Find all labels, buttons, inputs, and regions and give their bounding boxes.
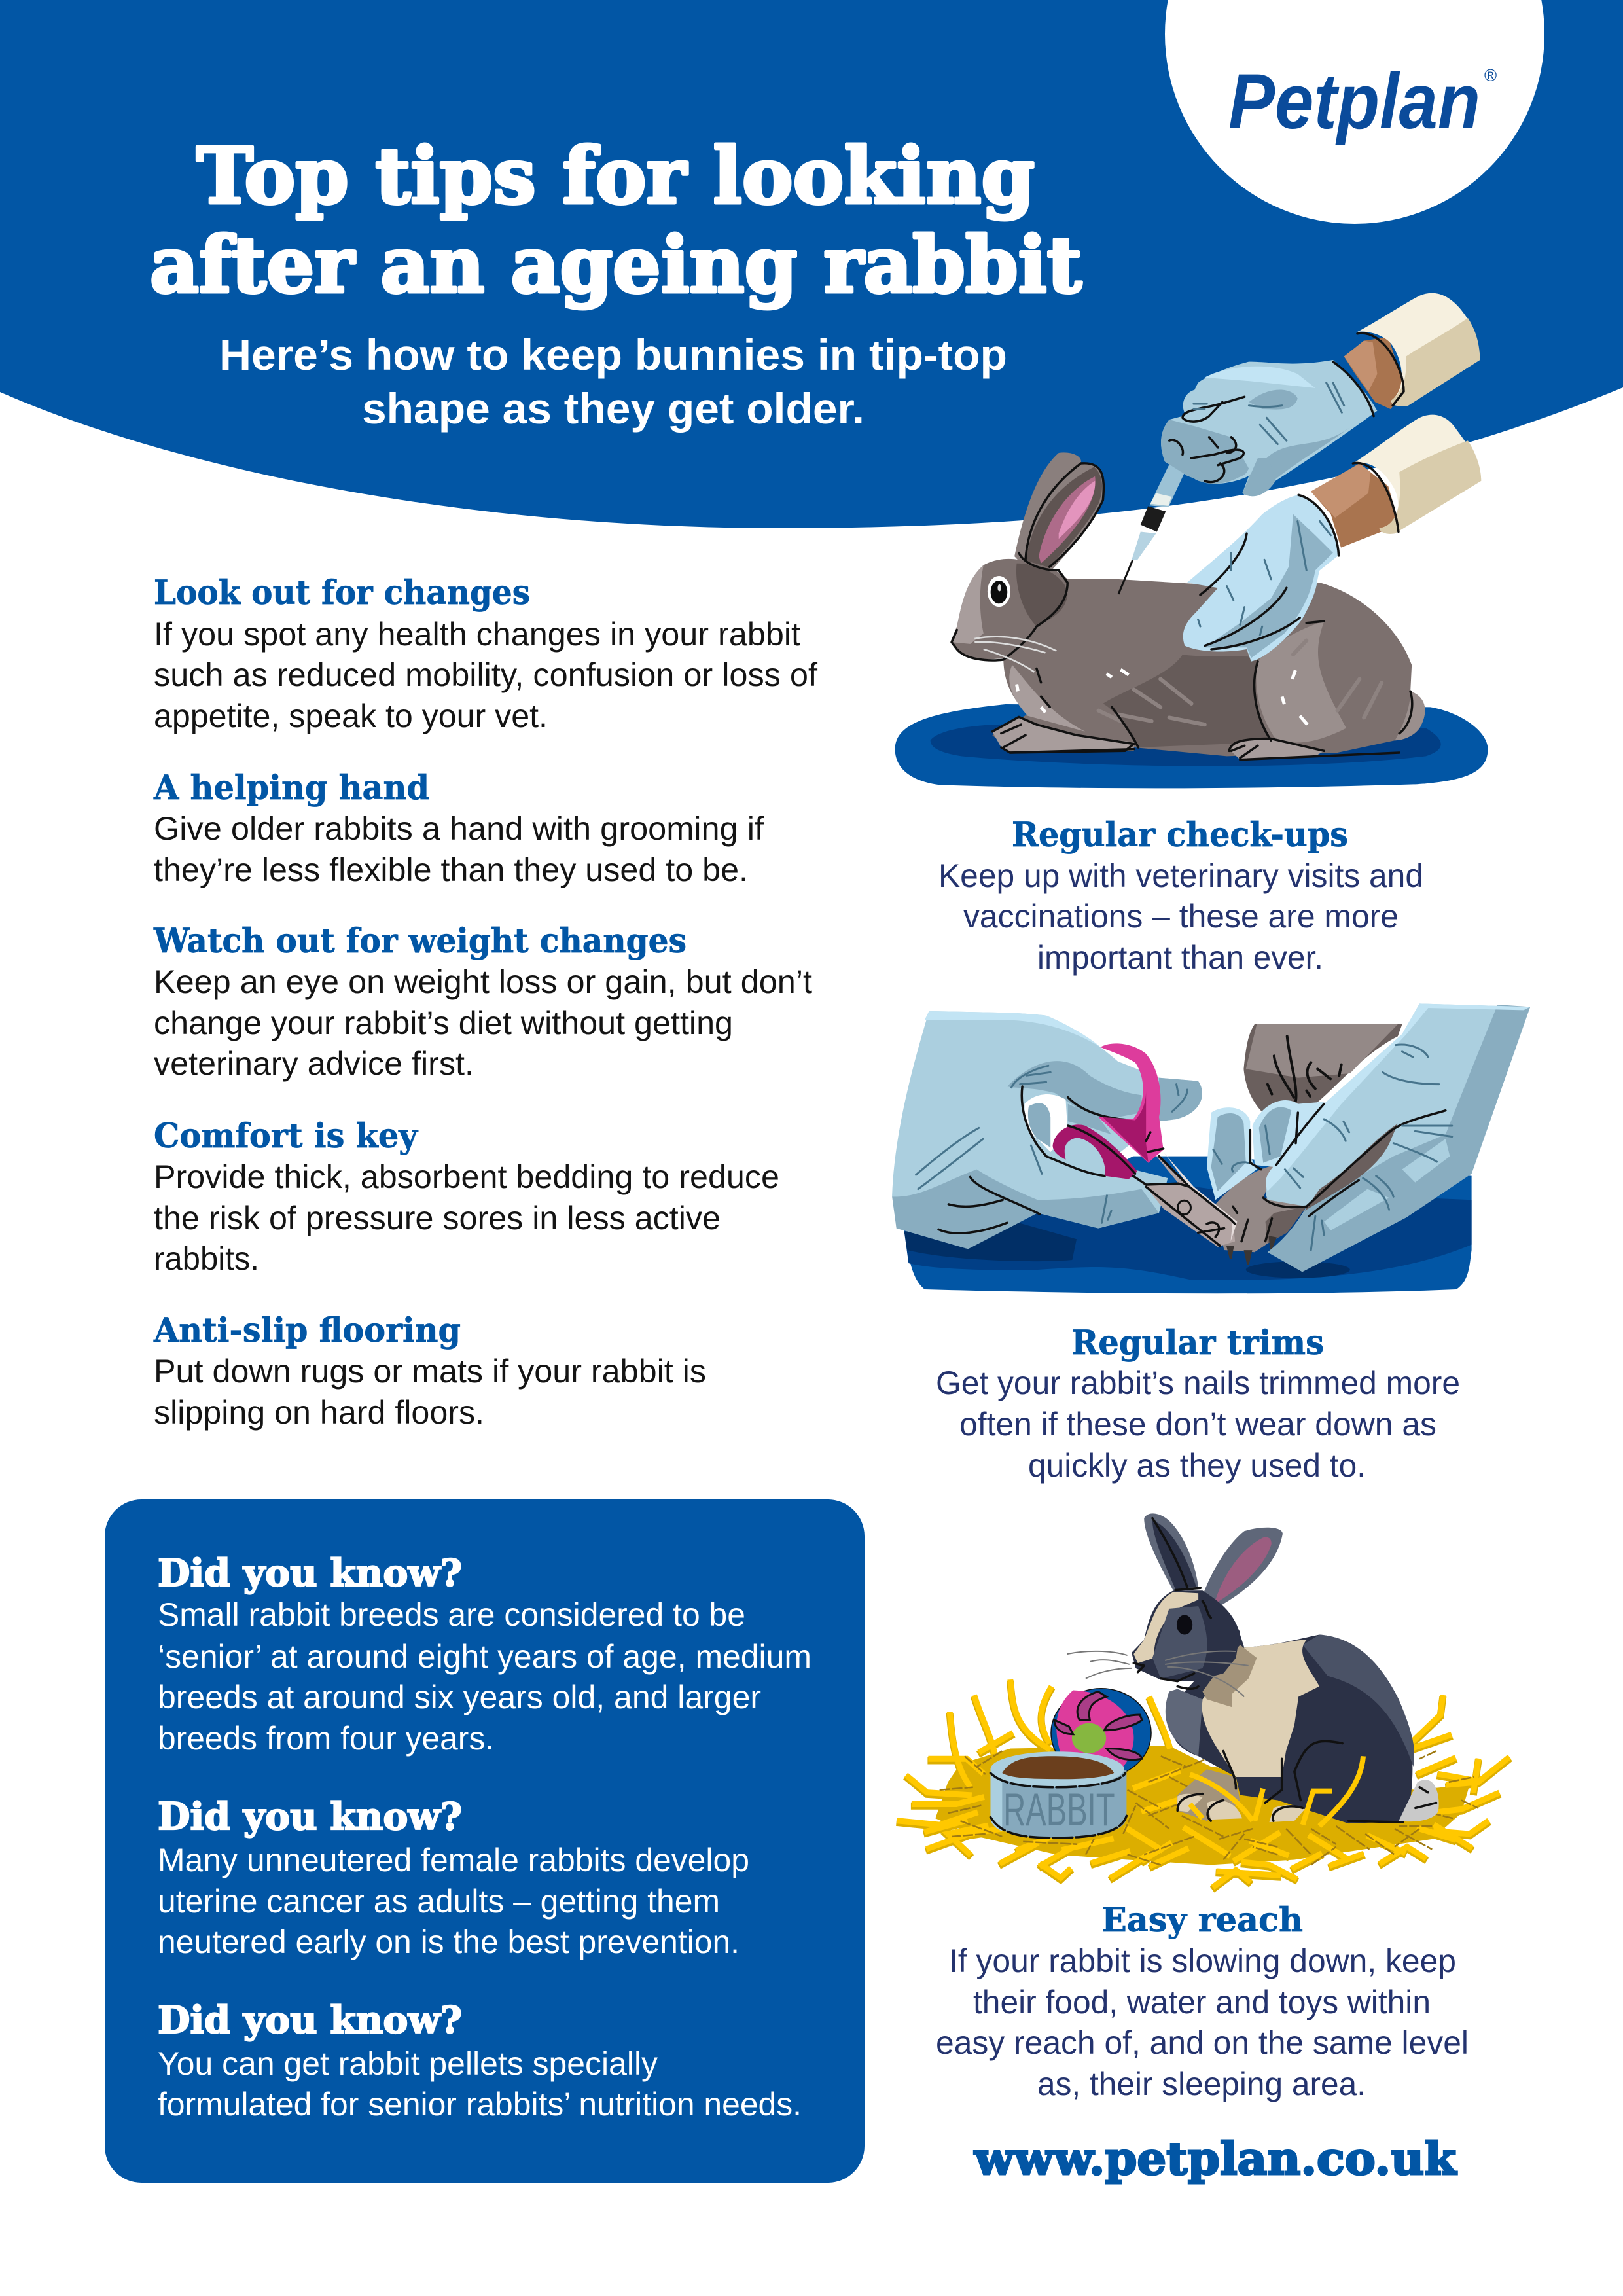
table surface — [904, 1157, 1472, 1293]
illustration: rabbit with food, toy and straw: RABBIT — [1003, 1784, 1115, 1836]
tip: Look out for changes — [154, 573, 817, 734]
rabbit paw — [1215, 1165, 1307, 1265]
tip: Anti-slip flooring: slipping on hard floors. — [154, 1394, 484, 1431]
fact: pellets: You can get rabbit pellets specially — [158, 2045, 658, 2082]
syringe — [1118, 430, 1201, 594]
tip: Watch out for weight changes: Watch out for weight changes — [153, 922, 687, 961]
tip: Watch out for weight changes — [153, 922, 812, 1082]
fact: neutering — [158, 1795, 749, 1960]
tip: Anti-slip flooring: Anti-slip flooring — [153, 1311, 461, 1350]
gloved hand with syringe and sleeve — [1161, 293, 1480, 496]
subtitle: shape as they get older. — [362, 384, 865, 433]
subtitle — [219, 331, 1007, 433]
tip: A helping hand: they’re less flexible than they used to be. — [154, 852, 748, 888]
fact: pellets: Did you know? — [158, 1998, 462, 2042]
tip: Regular trims — [936, 1323, 1460, 1484]
tip: Comfort is key: the risk of pressure sores in less active — [154, 1200, 721, 1236]
illustration: rabbit with food, toy and straw — [900, 1513, 1507, 1888]
blue mat — [895, 704, 1488, 788]
fact: senior ages: Did you know? — [158, 1551, 462, 1595]
website url: www.petplan.co.uk — [974, 2133, 1457, 2185]
fact: senior ages: breeds at around six years old, and larger — [158, 1679, 761, 1715]
tip: Regular trims: Get your rabbit’s nails trimmed more — [936, 1365, 1460, 1401]
fact: neutering: neutered early on is the best prevention. — [158, 1924, 740, 1960]
tip: Look out for changes: If you spot any health changes in your rabbit — [154, 616, 800, 653]
rabbit — [1067, 1513, 1439, 1823]
header banner — [0, 0, 1623, 528]
tip: Regular check-ups: vaccinations – these are more — [963, 898, 1399, 935]
food bowl — [990, 1751, 1126, 1838]
title: after an ageing rabbit — [150, 219, 1082, 310]
tip: Regular trims: often if these don’t wear down as — [959, 1406, 1436, 1443]
tip: A helping hand: A helping hand — [153, 768, 429, 808]
fact: pellets: formulated for senior rabbits’ nutrition needs. — [158, 2086, 802, 2123]
tip: A helping hand — [153, 768, 764, 888]
tip: Anti-slip flooring — [153, 1311, 706, 1431]
tip: Easy reach — [936, 1901, 1469, 2102]
tip: Regular trims: quickly as they used to. — [1028, 1447, 1366, 1484]
tip: Look out for changes: Look out for changes — [154, 573, 530, 613]
tip: Easy reach: their food, water and toys within — [973, 1984, 1431, 2020]
tip: Easy reach: Easy reach — [1101, 1901, 1303, 1940]
fact: neutering: uterine cancer as adults – getting them — [158, 1883, 720, 1920]
tip: Regular check-ups — [938, 816, 1423, 976]
illustration: vet injecting a rabbit — [895, 293, 1488, 788]
gloved hand on rabbit's back and sleeve — [1183, 415, 1481, 662]
logo: Petplan: ® — [1484, 65, 1497, 85]
fact: senior ages — [158, 1551, 812, 1757]
tip: Watch out for weight changes: Keep an eye on weight loss or gain, but don’t — [154, 963, 812, 1000]
tip: Look out for changes: appetite, speak to your vet. — [154, 698, 548, 734]
logo: Petplan: Petplan — [1228, 58, 1480, 145]
tip: Regular check-ups: Regular check-ups — [1012, 816, 1348, 855]
tip: Regular trims: Regular trims — [1071, 1323, 1324, 1363]
panel: did you know — [105, 1499, 865, 2183]
scissors — [1053, 1043, 1237, 1247]
fact: senior ages: ‘senior’ at around eight years of age, medium — [158, 1638, 812, 1675]
rabbit — [950, 452, 1425, 760]
tip: Comfort is key: rabbits. — [154, 1240, 259, 1277]
right gloved hand — [1207, 1003, 1530, 1272]
tip: Regular check-ups: Keep up with veterinary visits and — [938, 857, 1423, 894]
tip: Regular check-ups: important than ever. — [1037, 939, 1323, 976]
fact: senior ages: Small rabbit breeds are considered to be — [158, 1596, 745, 1633]
tip: A helping hand: Give older rabbits a hand with grooming if — [154, 810, 764, 847]
logo: Petplan — [1165, 0, 1544, 224]
fact: neutering: Many unneutered female rabbits develop — [158, 1842, 749, 1878]
tip: Look out for changes: such as reduced mobility, confusion or loss of — [154, 656, 817, 693]
fact: senior ages: breeds from four years. — [158, 1720, 494, 1757]
title: Top tips for looking — [196, 130, 1035, 221]
tip: Comfort is key: Provide thick, absorbent bedding to reduce — [154, 1158, 779, 1195]
tip: Easy reach: If your rabbit is slowing down, keep — [949, 1943, 1456, 1979]
subtitle: Here’s how to keep bunnies in tip-top — [219, 331, 1007, 379]
tip: Comfort is key: Comfort is key — [154, 1117, 418, 1156]
illustration: trimming a rabbit's nails — [892, 1003, 1530, 1293]
rabbit fur — [1243, 1024, 1402, 1117]
straw base — [900, 1683, 1507, 1888]
tip: Anti-slip flooring: Put down rugs or mats if your rabbit is — [154, 1353, 706, 1390]
toy ball — [1051, 1689, 1151, 1778]
tip: Comfort is key — [154, 1117, 779, 1277]
fact: pellets — [158, 1998, 802, 2123]
tip: Easy reach: as, their sleeping area. — [1037, 2066, 1366, 2102]
left gloved hand — [892, 1011, 1202, 1249]
title — [150, 130, 1082, 310]
fact: neutering: Did you know? — [158, 1795, 462, 1839]
tip: Easy reach: easy reach of, and on the same level — [936, 2024, 1469, 2061]
tip: Watch out for weight changes: veterinary advice first. — [154, 1045, 474, 1082]
tip: Watch out for weight changes: change your rabbit’s diet without getting — [154, 1005, 733, 1041]
foreground straws — [1190, 1756, 1363, 1826]
